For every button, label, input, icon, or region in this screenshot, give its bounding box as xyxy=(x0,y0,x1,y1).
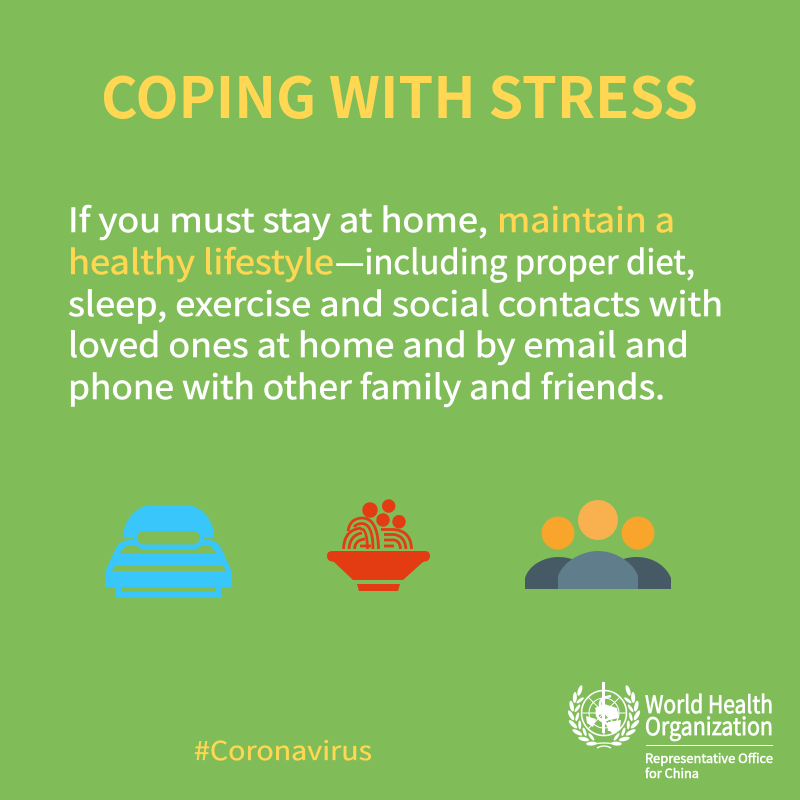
logo text: Representative Office xyxy=(645,748,773,767)
logo text: for China xyxy=(645,763,699,782)
text block: healthy lifestyle advice xyxy=(68,193,723,409)
hashtag: #Coronavirus xyxy=(194,731,372,768)
logo text: World Health xyxy=(645,685,773,720)
text block: healthy lifestyle advice: sleep, exercise and social contacts with xyxy=(68,277,723,326)
title: COPING WITH STRESS xyxy=(101,53,698,135)
icon: group of people xyxy=(525,500,671,589)
text block: healthy lifestyle advice: healthy lifestyle xyxy=(68,235,334,284)
logo text: Organization xyxy=(645,707,773,742)
icon: bowl of noodles xyxy=(327,499,430,591)
logo: World Health Organization xyxy=(567,682,773,782)
text block: healthy lifestyle advice: —including proper diet, xyxy=(335,235,695,284)
text block: healthy lifestyle advice: If you must stay at home, xyxy=(68,193,488,242)
icon: WHO emblem xyxy=(567,682,641,748)
text block: healthy lifestyle advice: loved ones at home and by email and xyxy=(68,318,689,367)
logo text xyxy=(645,685,773,782)
icon: bed xyxy=(105,505,232,598)
text block: healthy lifestyle advice: maintain a xyxy=(497,193,675,242)
text block: healthy lifestyle advice: phone with other family and friends. xyxy=(68,360,665,409)
